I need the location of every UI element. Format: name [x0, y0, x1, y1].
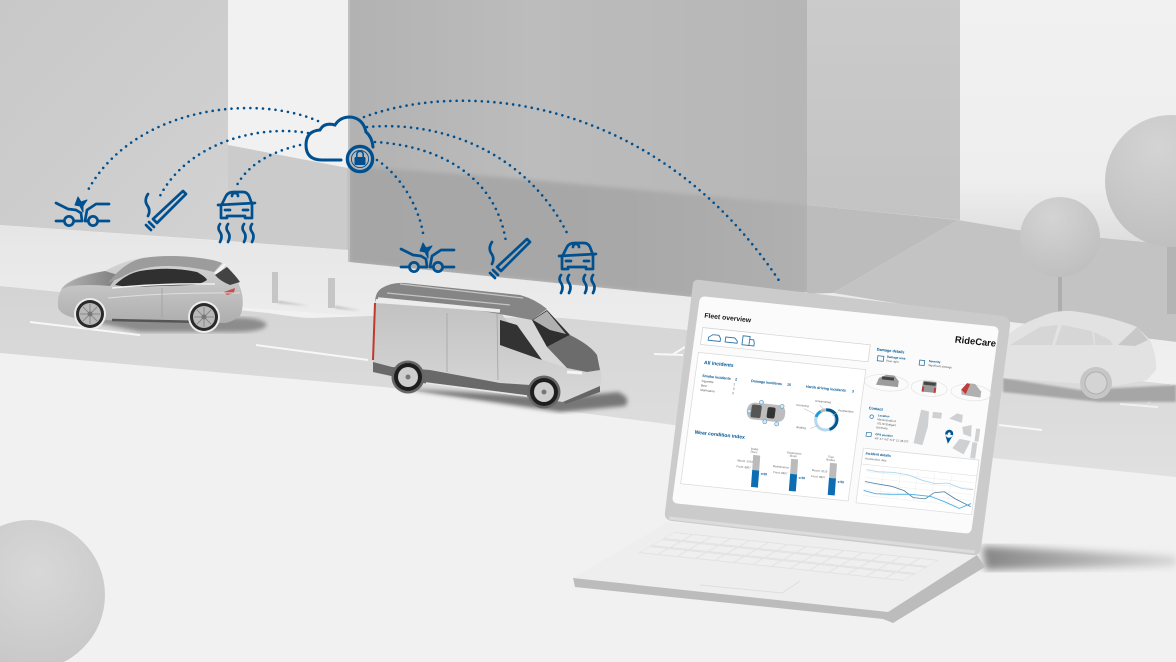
- panel: contact: Location: [878, 413, 890, 418]
- panel: all incidents: Brake: [751, 447, 759, 451]
- panel: incident details chart: Acceleration data: [865, 456, 887, 463]
- panel: all incidents: 15: [787, 383, 791, 387]
- car: faded wagon behind laptop: [1003, 311, 1176, 402]
- panel: damage details: Severity: [928, 359, 941, 364]
- laptop lid: [665, 280, 1010, 555]
- panel: damage details: Rear right: [886, 359, 899, 364]
- sphere bottom left: [0, 520, 105, 662]
- icon: collision (van): [401, 243, 454, 272]
- dotted arcs: vehicle data to cloud and cloud to laptop: [87, 101, 780, 282]
- panel: all incidents: Marihuana: [700, 388, 715, 393]
- road markings: [30, 322, 1042, 430]
- keyboard: [638, 532, 940, 581]
- panel: all incidents: ◂ 50: [836, 480, 844, 484]
- bollards: [272, 272, 362, 311]
- white column: [228, 0, 348, 168]
- icon: collision (left): [56, 197, 109, 226]
- panel: all incidents: Smoke incidents: [702, 374, 731, 381]
- panel: all incidents: Maintenance: [773, 464, 790, 470]
- panel: incident details chart: Incident details: [865, 451, 891, 458]
- panel: all incidents: Cigarette: [701, 379, 714, 384]
- panel: all incidents: 2: [735, 377, 737, 382]
- panel: all incidents: [681, 352, 866, 501]
- left building block: [0, 0, 228, 241]
- trackpad: [700, 581, 800, 593]
- large central building: [350, 0, 807, 297]
- panel: all incidents: 0: [732, 391, 735, 395]
- panel: all incidents: Front: 8807: [736, 464, 751, 470]
- donut chart: Unwarranted: [815, 399, 832, 404]
- panel: contact: [865, 406, 913, 444]
- panel: incident details chart: [856, 448, 979, 515]
- laptop screen: [672, 296, 1000, 534]
- panel: all incidents: ◂ 50: [760, 472, 768, 476]
- panel: contact: 48° 47' 4.6" N 9° 11' 36.3"E: [875, 436, 909, 444]
- donut chart: Braking: [796, 425, 807, 430]
- panel: all incidents: 0: [733, 387, 735, 391]
- panel: damage details: Damage details: [876, 348, 905, 354]
- panel: contact: Marienstraße 6: [877, 417, 897, 423]
- panel: all incidents: Harsh driving incidents: [806, 385, 846, 393]
- icon: harsh driving car (van): [559, 243, 596, 293]
- panel: all incidents: Discs: [750, 450, 758, 454]
- panel: all incidents: Mount: 2019: [737, 458, 754, 464]
- icon: cigarette (van): [490, 239, 530, 278]
- panel: all incidents: 2: [733, 382, 736, 386]
- icon: harsh driving car (left): [218, 192, 255, 242]
- laptop base: [573, 555, 985, 623]
- panel: all incidents: Front: 8807: [773, 470, 788, 476]
- panel: all incidents: Front: 8807: [811, 474, 826, 479]
- map: [912, 409, 982, 459]
- laptop: [573, 280, 1176, 623]
- car: silver hatchback: [58, 256, 267, 333]
- panel: contact: Germany: [876, 425, 889, 430]
- donut chart: Acceleration: [838, 408, 854, 414]
- road: [0, 286, 1176, 477]
- panel: all incidents: Mount: 2019: [812, 468, 828, 474]
- wear condition bars: Wear condition index: [694, 430, 745, 441]
- panel: all incidents: Suspension: [787, 450, 802, 456]
- ground strip behind road: [0, 225, 1176, 400]
- panel: contact: GPS position: [875, 432, 893, 438]
- wheels: [392, 360, 424, 394]
- donut chart: Cornering: [796, 403, 809, 408]
- right wall: [960, 0, 1176, 245]
- icon: cloud with lock: [306, 117, 373, 172]
- panel: all incidents: Beer: [701, 383, 708, 388]
- icon: cigarette (left): [146, 191, 186, 230]
- panel: damage details: Damage area: [887, 355, 906, 361]
- panel: contact: 70178 Stuttgart: [877, 421, 896, 427]
- laptop shadow: [982, 546, 1176, 570]
- icon: map pin: [944, 429, 954, 444]
- car top view: [745, 399, 787, 427]
- panel: damage details: [863, 347, 996, 403]
- van: [373, 283, 627, 412]
- panel: all incidents: All incidents: [704, 360, 734, 369]
- panel: all incidents: 3: [852, 389, 854, 394]
- panel: all incidents: Tires: [828, 455, 835, 459]
- panel: all incidents: Struts: [789, 454, 798, 458]
- panel: all incidents: Damage incidents: [751, 379, 782, 386]
- right column: [807, 0, 960, 220]
- vehicle tabs: [700, 328, 870, 362]
- screen title: Fleet overview: [704, 313, 752, 324]
- panel: all incidents: ◂ 50: [797, 476, 805, 480]
- panel: damage details: Significant damage: [928, 363, 953, 369]
- trees: [1020, 115, 1176, 314]
- panel: contact: Contact: [868, 406, 884, 412]
- wheels: [74, 298, 106, 330]
- panel: all incidents: Brakes: [826, 457, 836, 462]
- brand: RideCare: RideCare: [954, 334, 997, 349]
- donut chart: [793, 397, 855, 435]
